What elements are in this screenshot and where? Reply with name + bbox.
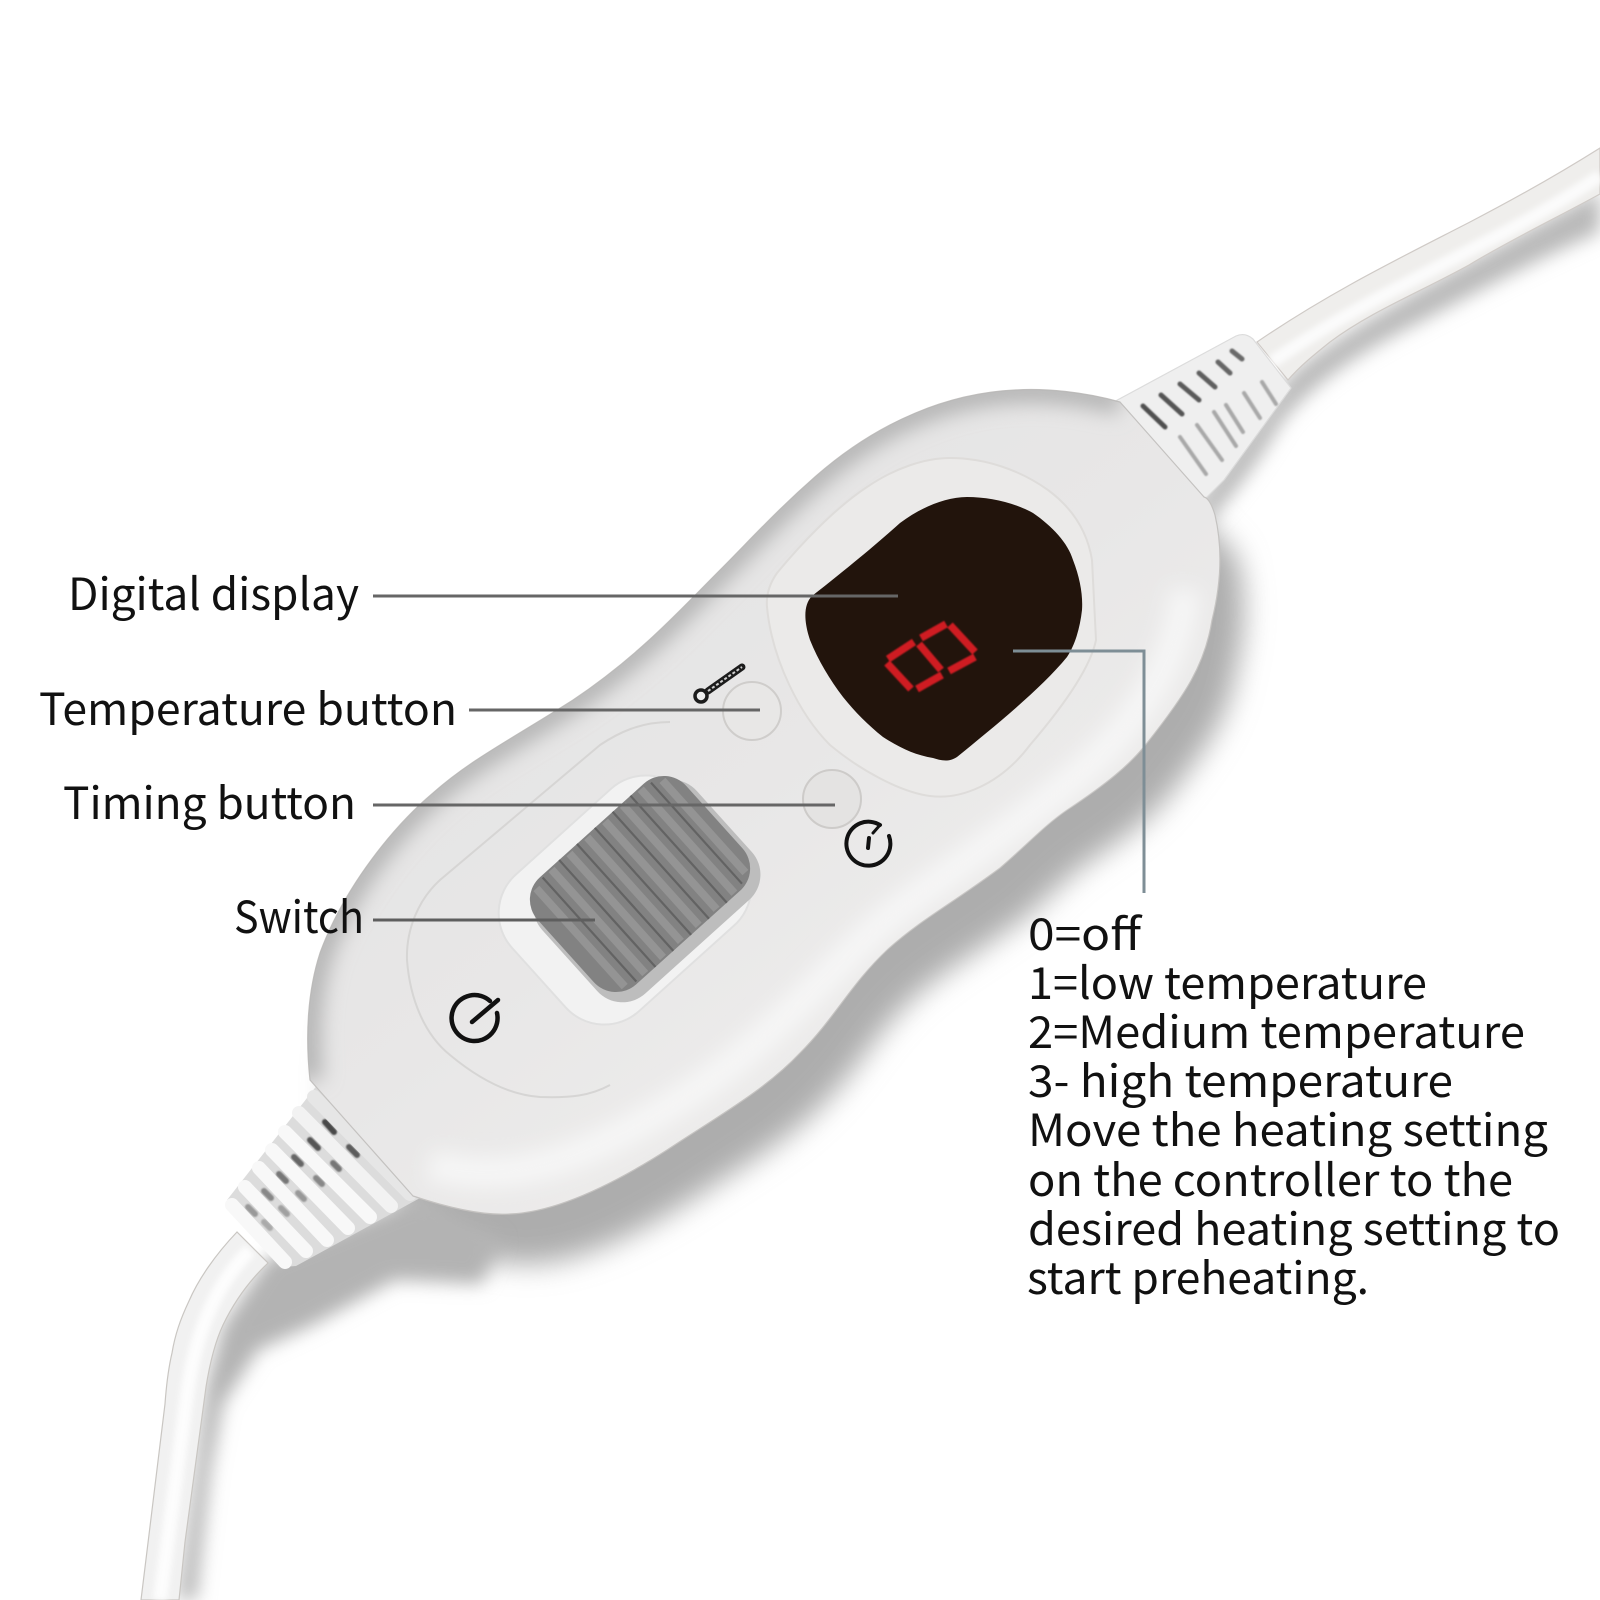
digital display screen — [805, 497, 1082, 761]
leader: timing button — [373, 804, 835, 806]
icon: thermometer — [695, 667, 742, 702]
leader: temperature settings — [1013, 651, 1144, 893]
switch rim — [520, 766, 774, 1016]
soft drop shadow — [178, 190, 1600, 1600]
seven segment digit — [887, 624, 975, 689]
label: switch: Switch — [234, 882, 364, 946]
icon: timer — [846, 822, 890, 866]
timing button — [803, 770, 861, 828]
controller body — [308, 390, 1220, 1214]
text block: temperature settings and instructions: desired heating setting to — [1028, 1194, 1560, 1258]
temperature button — [723, 682, 781, 740]
label: digital display: Digital display — [68, 559, 359, 623]
label: temperature button: Temperature button — [39, 674, 457, 738]
text block: temperature settings and instructions: 3- high temperature — [1028, 1046, 1453, 1110]
text block: temperature settings and instructions: Move the heating setting — [1028, 1095, 1548, 1159]
text block: temperature settings and instructions: on the controller to the — [1028, 1145, 1513, 1209]
text block: temperature settings and instructions: 0=off — [1028, 899, 1143, 963]
strain relief: lower left — [227, 1084, 420, 1267]
cable: upper right — [1257, 148, 1600, 380]
label: timing button: Timing button — [63, 768, 356, 832]
text block: temperature settings and instructions — [1027, 899, 1560, 1307]
recess around display — [767, 458, 1096, 797]
leader: digital display — [373, 594, 898, 598]
leader: switch — [373, 918, 595, 922]
cable: lower left — [141, 1232, 268, 1600]
leader: temperature button — [469, 708, 760, 712]
text block: temperature settings and instructions: 1=low temperature — [1028, 948, 1427, 1012]
switch bezel — [477, 754, 773, 1046]
text block: temperature settings and instructions: 2=Medium temperature — [1028, 997, 1525, 1061]
text block: temperature settings and instructions: start preheating. — [1027, 1243, 1369, 1307]
icon: power — [452, 995, 498, 1041]
switch slider — [518, 764, 762, 1004]
recess around switch — [407, 722, 670, 1097]
strain relief: upper right — [1110, 335, 1291, 500]
